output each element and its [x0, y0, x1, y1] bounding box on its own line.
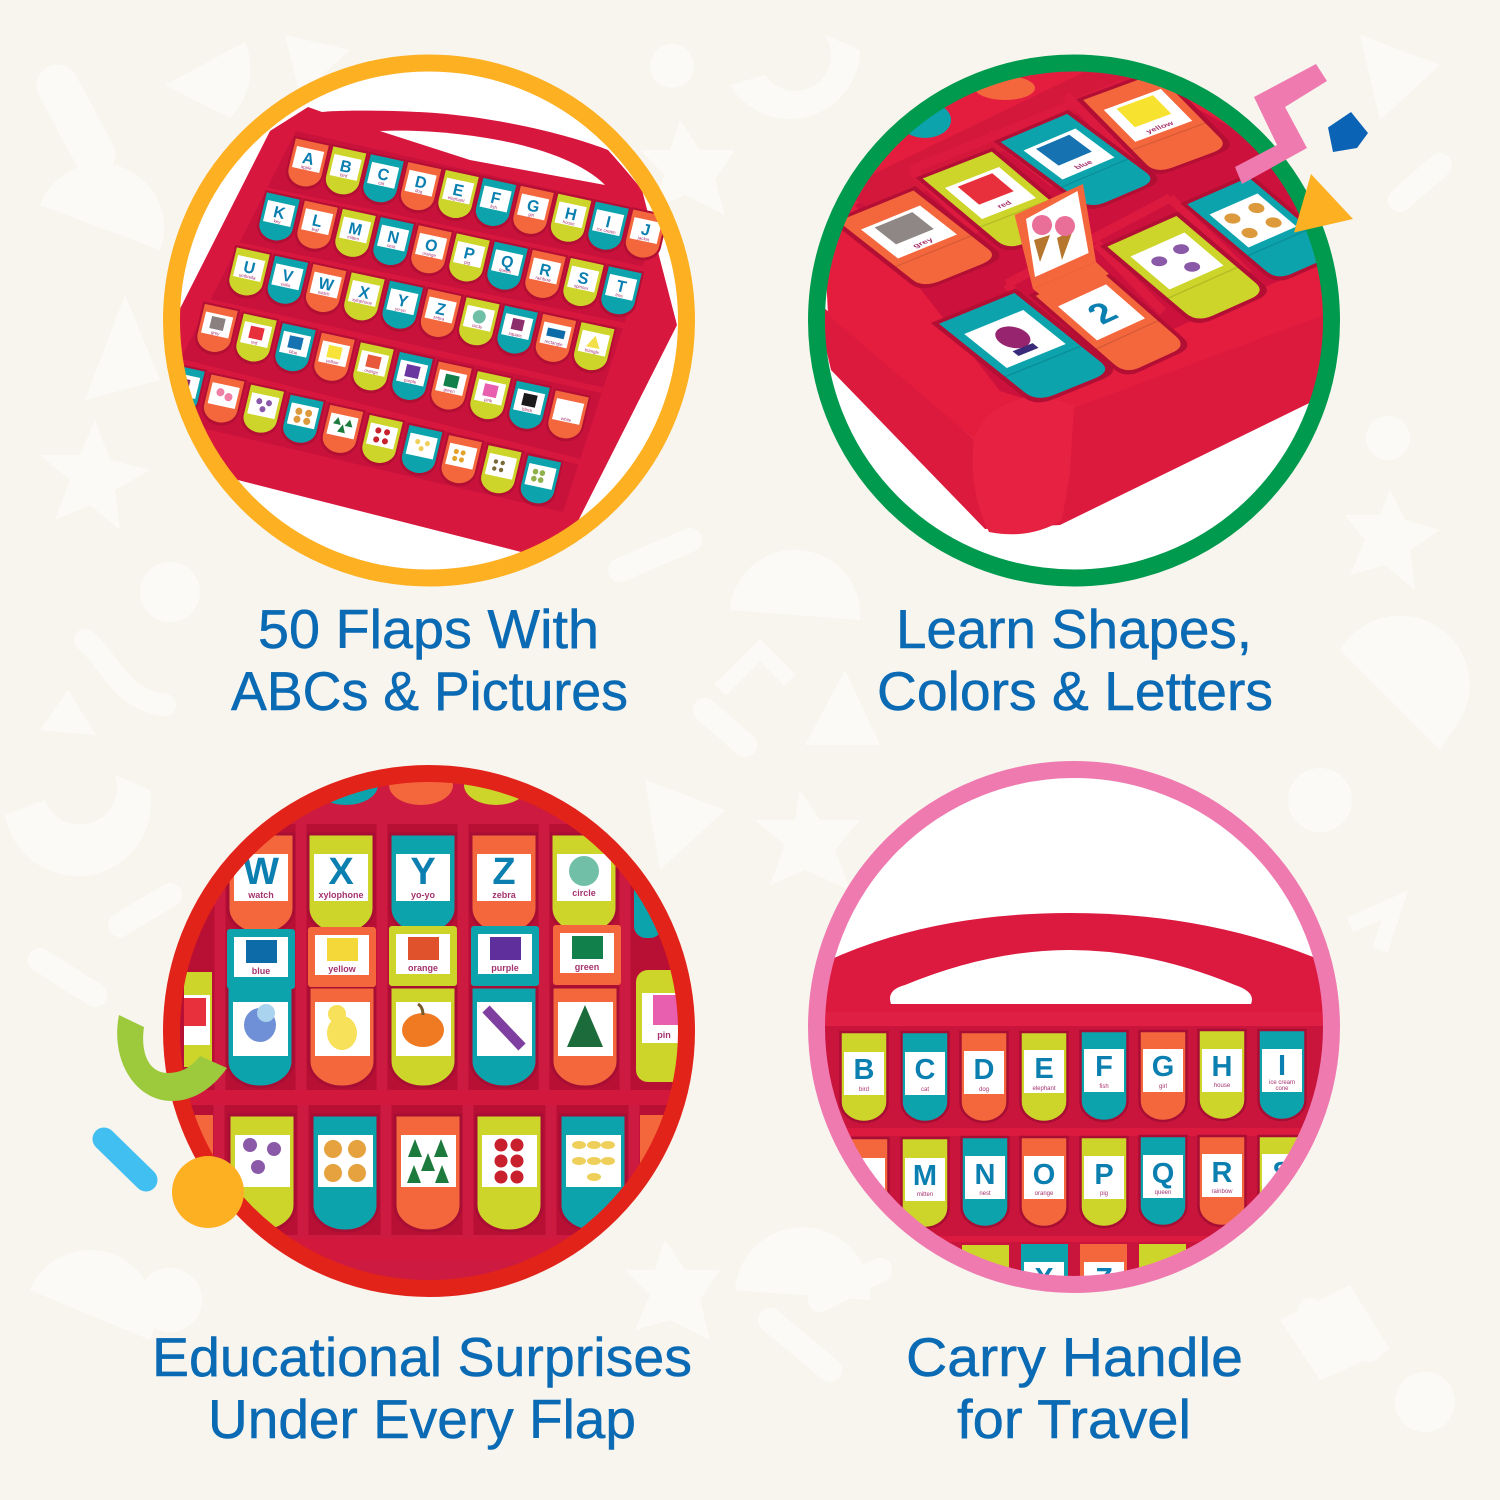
alphabet row two: tree	[615, 292, 624, 299]
alphabet row three: watch	[318, 289, 331, 297]
tray recess	[182, 131, 645, 512]
colour row: yellow	[326, 358, 340, 366]
flap: mitten	[931, 288, 1120, 407]
bottom row flaps	[229, 1115, 626, 1231]
alphabet row two: queen	[499, 267, 512, 275]
alphabet row one: house	[562, 219, 576, 227]
alphabet row three	[224, 245, 617, 377]
top row flaps W to circle: yo-yo	[411, 890, 435, 900]
alphabet row two: T	[614, 277, 628, 297]
second row flaps	[842, 1136, 1306, 1228]
top row flaps W to circle: X	[328, 851, 354, 893]
icon: orange triangle	[1294, 174, 1353, 232]
toy body with handle	[150, 107, 677, 553]
alphabet row three: triangle	[584, 347, 600, 355]
horizontal bands	[170, 824, 690, 1235]
second row flaps: Q	[1152, 1158, 1174, 1190]
alphabet row two: rainbow	[535, 275, 552, 283]
alphabet row one: apple	[300, 164, 313, 171]
alphabet row three: umbrella	[238, 272, 257, 281]
first row flaps: I	[1278, 1050, 1286, 1082]
flap: number 2	[1029, 263, 1194, 379]
red ring	[172, 774, 686, 1288]
flap: grey: grey	[910, 236, 936, 249]
alphabet row three: circle	[471, 323, 483, 330]
toy side wall	[825, 308, 1323, 529]
raised flaps with colours: green	[575, 962, 599, 972]
flap: flowers	[1100, 211, 1274, 327]
alphabet row three: W	[316, 274, 336, 295]
lower flaps with pictures	[227, 987, 618, 1087]
colour row: red	[250, 339, 258, 346]
flap: blue: blue	[1072, 159, 1095, 171]
picture row	[184, 365, 564, 506]
second row flaps: M	[913, 1160, 937, 1192]
alphabet row two: mitten	[347, 234, 360, 242]
alphabet row three: Y	[395, 291, 410, 311]
side flaps: pin	[657, 1030, 671, 1040]
colour row: purple	[404, 377, 417, 385]
first row flaps: fish	[1099, 1084, 1109, 1090]
alphabet row three: rectangle	[544, 339, 564, 347]
alphabet row two: nest	[386, 243, 397, 250]
alphabet row three: yo-yo	[394, 306, 407, 313]
caption: handle: for Travel	[957, 1388, 1191, 1450]
alphabet row one: elephant	[447, 195, 466, 204]
alphabet row two: spinner	[573, 283, 589, 291]
top row flaps W to circle: xylophone	[318, 890, 364, 900]
alphabet row three: V	[280, 266, 295, 286]
caption: shapes: Learn Shapes,	[896, 598, 1252, 660]
alphabet row one: J	[639, 220, 652, 240]
yellow ring	[172, 63, 686, 578]
second row flaps: nest	[979, 1191, 991, 1197]
first row flaps: D	[974, 1054, 994, 1086]
icon: lime arc	[117, 1015, 227, 1101]
alphabet row two: K	[271, 203, 287, 223]
icon: yellow dot	[172, 1156, 244, 1228]
caption: surprises: Under Every Flap	[208, 1388, 636, 1450]
alphabet row one: fish	[490, 204, 498, 210]
tray dividers	[927, 109, 1251, 315]
alphabet row two: Q	[499, 252, 515, 272]
alphabet row one: G	[525, 196, 541, 217]
alphabet row three: U	[241, 258, 257, 278]
first row flaps: bird	[859, 1087, 869, 1093]
top row flaps W to circle: Y	[410, 851, 436, 893]
alphabet row one: jacket	[636, 235, 651, 242]
alphabet row three: xylophone	[352, 297, 373, 306]
caption: surprises	[152, 1326, 692, 1450]
top row flaps W to circle	[228, 834, 662, 938]
first row flaps: ice cream	[1269, 1080, 1295, 1086]
alphabet row three: square	[508, 331, 523, 339]
third row flaps	[962, 1244, 1186, 1295]
side flaps	[184, 970, 678, 1163]
toy top surface	[826, 72, 1322, 439]
alphabet row one: dog	[414, 188, 423, 195]
colour row: green	[443, 387, 456, 394]
second row flaps: queen	[1155, 1190, 1171, 1196]
alphabet row two: leaf	[311, 226, 320, 233]
flap: grey	[842, 186, 1000, 288]
first row flaps: elephant	[1032, 1086, 1056, 1092]
second row flaps: spinner	[1272, 1189, 1292, 1195]
alphabet row one: A	[300, 149, 316, 169]
alphabet row one: D	[413, 173, 428, 193]
second row flaps: R	[1212, 1157, 1233, 1189]
colour row: pink	[484, 397, 493, 404]
flap: yellow: yellow	[1144, 120, 1176, 135]
tray recess	[855, 109, 1299, 398]
first row flaps: house	[1214, 1083, 1231, 1089]
colour row: grey	[210, 330, 221, 337]
alphabet row two: N	[385, 228, 401, 248]
third row flaps: Z	[1095, 1263, 1113, 1295]
colour row	[192, 302, 591, 445]
first row flaps: cone	[1275, 1086, 1289, 1092]
flap: cats	[1180, 178, 1317, 281]
alphabet row two: pig	[464, 259, 471, 266]
handle opening	[380, 131, 605, 185]
caption: handle: Carry Handle	[906, 1326, 1243, 1388]
second row flaps: O	[1033, 1159, 1055, 1191]
third row flaps: X	[1034, 1263, 1054, 1295]
alphabet row one: C	[375, 165, 391, 185]
alphabet row two: L	[310, 211, 324, 231]
alphabet row two: S	[576, 269, 591, 289]
row rails	[165, 190, 655, 463]
raised flaps with colours: blue	[252, 966, 270, 976]
top row flaps W to circle: circle	[572, 888, 596, 898]
icon: pink zigzag	[1235, 64, 1327, 184]
first row flaps: C	[915, 1054, 936, 1086]
alphabet row one: B	[338, 157, 353, 177]
alphabet row one: ice cream	[596, 226, 616, 235]
first row flaps: cat	[921, 1087, 929, 1093]
alphabet row two: key	[273, 218, 282, 225]
partial top flaps	[330, 782, 519, 805]
top rail	[825, 1012, 1325, 1026]
flap: red: red	[995, 199, 1014, 210]
corner pillar	[973, 408, 1074, 534]
top of tray	[856, 72, 1126, 202]
open flap hinge	[1033, 262, 1109, 294]
caption: flaps	[231, 598, 628, 722]
tray recess	[825, 1026, 1325, 1292]
handle opening	[890, 950, 1252, 1004]
panel: carry handle photo	[825, 778, 1323, 1276]
alphabet row one: E	[451, 181, 466, 201]
first row flaps: H	[1212, 1051, 1232, 1083]
panel: surprises photo	[170, 765, 690, 1290]
icon: blue pentagon	[1328, 112, 1368, 152]
caption: handle	[906, 1326, 1243, 1450]
caption: surprises: Educational Surprises	[152, 1326, 692, 1388]
second row flaps: mitten	[917, 1192, 933, 1198]
alphabet row three: zebra	[433, 314, 445, 322]
alphabet row one: F	[489, 189, 503, 209]
alphabet row two: R	[537, 260, 553, 281]
first row flaps: dog	[979, 1087, 989, 1093]
flap: blue	[993, 110, 1164, 213]
first row flaps: girl	[1159, 1084, 1167, 1090]
second row flaps: rainbow	[1211, 1189, 1233, 1195]
first row flaps: G	[1152, 1051, 1174, 1083]
second row flaps: pig	[1100, 1191, 1108, 1197]
alphabet row two: P	[462, 244, 477, 264]
raised flaps with colours: yellow	[328, 964, 357, 974]
second row flaps: orange	[1035, 1191, 1054, 1197]
top row flaps W to circle: watch	[247, 890, 274, 900]
alphabet row two: M	[347, 219, 364, 240]
colour row: black	[522, 406, 534, 414]
first row flaps: F	[1095, 1051, 1113, 1083]
alphabet row two: orange	[422, 250, 437, 258]
flap: red	[916, 148, 1053, 250]
alphabet row one: H	[563, 204, 578, 224]
alphabet row one: I	[604, 213, 613, 232]
colour row: white	[561, 416, 572, 423]
flap: number 2: 2	[1078, 296, 1126, 330]
top row flaps W to circle: zebra	[492, 890, 517, 900]
alphabet row two: O	[423, 236, 439, 256]
panel: learn shapes photo	[825, 72, 1323, 570]
first row flaps: E	[1034, 1053, 1054, 1085]
alphabet row one	[283, 136, 669, 264]
vertical rails	[219, 824, 634, 1235]
green ring	[816, 63, 1332, 578]
open flap: ice cream	[1015, 184, 1096, 289]
caption: flaps: 50 Flaps With	[258, 598, 599, 660]
first row flaps: B	[854, 1054, 874, 1086]
alphabet row two	[254, 190, 644, 321]
caption: shapes: Colors & Letters	[877, 660, 1273, 722]
alphabet row one: bird	[339, 172, 348, 179]
raised flaps with colours: purple	[491, 963, 519, 973]
colour row: blue	[288, 349, 298, 356]
raised flaps with colours	[227, 925, 621, 989]
handle and body	[826, 913, 1322, 1242]
icon: blue pill	[104, 1139, 146, 1180]
band highlights	[170, 1090, 690, 1260]
panel: 50 flaps photo	[180, 72, 678, 570]
colour row: orange	[364, 367, 379, 375]
top row flaps W to circle: Z	[492, 851, 516, 893]
second row flaps: N	[975, 1159, 995, 1191]
partial flaps	[899, 76, 1035, 138]
top row flaps W to circle: W	[243, 851, 279, 893]
raised flaps with colours: orange	[408, 963, 438, 973]
alphabet row three: X	[357, 283, 372, 303]
flap: yellow	[1076, 78, 1230, 174]
second row flaps: S	[1272, 1157, 1292, 1189]
alphabet row one: cat	[378, 180, 385, 187]
alphabet row three: violin	[280, 281, 292, 288]
caption: flaps: ABCs & Pictures	[231, 660, 628, 722]
second row flaps: P	[1094, 1159, 1114, 1191]
caption: shapes	[877, 598, 1273, 722]
first row flaps	[840, 1030, 1306, 1122]
pink ring	[816, 770, 1332, 1284]
alphabet row three: Z	[434, 300, 448, 320]
alphabet row one: girl	[528, 212, 535, 218]
